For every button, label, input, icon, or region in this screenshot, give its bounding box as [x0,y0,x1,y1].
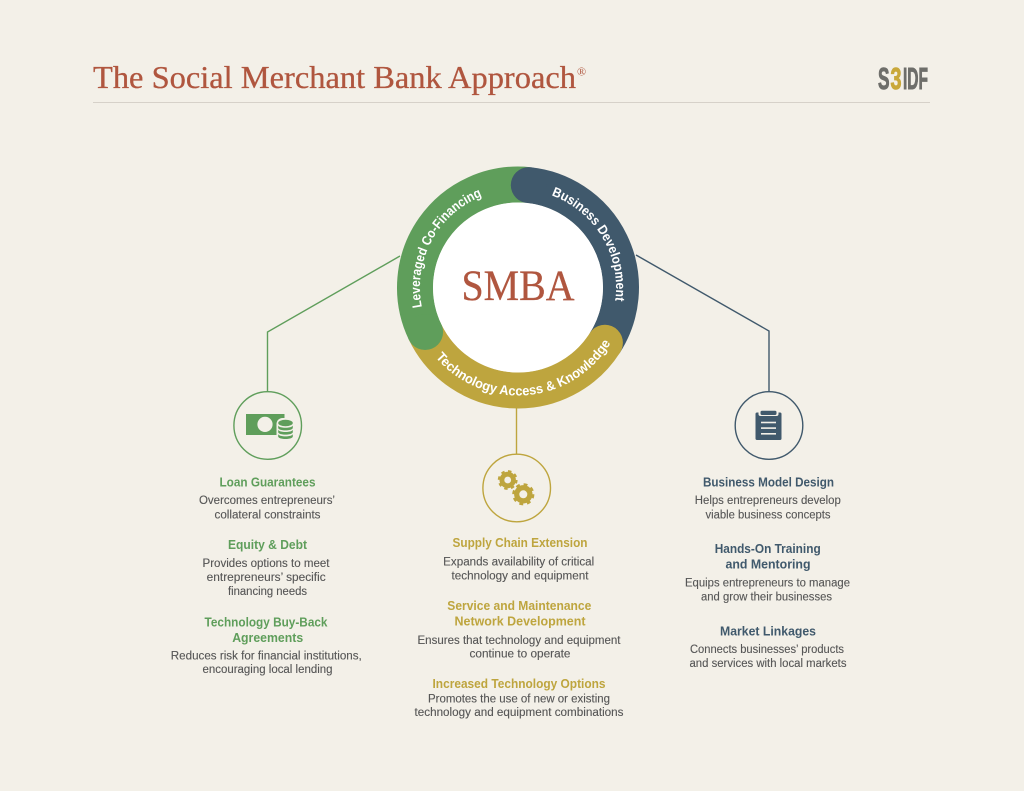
logo: S3IDF: S [878,61,890,96]
connector: green line to financing icon [268,256,400,392]
item: Technology Buy-Back Agreements: Agreements [232,631,303,645]
item: Service and Maintenance Network Development: continue to operate [470,649,570,661]
item: Supply Chain Extension: technology and equipment [452,570,589,582]
item: Equity & Debt: entrepreneurs’ specific [207,572,326,584]
item: Hands-On Training and Mentoring: and Mentoring [726,558,810,572]
panel: center column, technology [414,536,624,719]
item: Hands-On Training and Mentoring: Equips entrepreneurs to manage [685,578,850,590]
item: Service and Maintenance Network Development: Network Development [454,615,586,629]
connector: gold line to technology icon [516,405,518,454]
logo: S3IDF: 3 [890,61,902,96]
item: Hands-On Training and Mentoring: and grow their businesses [701,592,832,604]
SMBA ring diagram [397,166,639,408]
item: Market Linkages: Connects businesses’ products [690,644,844,656]
item: Supply Chain Extension: Supply Chain Extension [452,536,588,550]
item: Technology Buy-Back Agreements [171,616,362,676]
title: ® [577,64,586,78]
icon: gears [483,454,550,522]
item: Service and Maintenance Network Development: Service and Maintenance [447,599,591,613]
item: Technology Buy-Back Agreements: Reduces risk for financial institutions, [171,650,362,662]
item: Service and Maintenance Network Development: Ensures that technology and equipment [418,635,621,647]
ring label: Leveraged Co-Financing: Leveraged Co-Financing [412,190,482,308]
center circle with SMBA [433,202,603,372]
item: Technology Buy-Back Agreements: Technology Buy-Back [204,616,328,630]
item: Equity & Debt: financing needs [228,586,307,598]
item: Business Model Design [695,476,841,522]
item: Increased Technology Options: Increased Technology Options [432,677,606,691]
item: Service and Maintenance Network Development [418,599,621,661]
connector: blue line to business icon [636,255,769,392]
title: The Social Merchant Bank Approach [93,59,576,95]
item: Increased Technology Options [414,677,624,719]
panel: right column, business development [685,476,850,670]
ring label: Business Development: Business Development [552,187,624,302]
item: Loan Guarantees: Loan Guarantees [220,476,316,490]
item: Hands-On Training and Mentoring: Hands-On Training [715,542,821,556]
item: Equity & Debt: Equity & Debt [228,538,308,552]
item: Market Linkages: Market Linkages [720,625,816,639]
item: Hands-On Training and Mentoring [685,542,850,604]
item: Market Linkages: and services with local markets [690,658,847,670]
item: Business Model Design: viable business concepts [706,510,831,522]
item: Market Linkages [690,625,847,670]
item: Business Model Design: Helps entrepreneurs develop [695,495,841,507]
item: Business Model Design: Business Model Design [703,476,834,490]
item: Supply Chain Extension [443,536,594,582]
item: Equity & Debt [202,538,330,598]
item: Loan Guarantees [199,476,335,522]
icon: clipboard [735,392,803,459]
logo: S3IDF: IDF [903,61,928,96]
item: Increased Technology Options: Promotes the use of new or existing [428,694,610,706]
item: Technology Buy-Back Agreements: encouraging local lending [202,664,332,676]
item: Equity & Debt: Provides options to meet [202,558,330,570]
ring label: Technology Access & Knowledge: Technology Access & Knowledge [438,340,610,396]
logo: S3IDF [878,61,928,96]
icon: money and coins [234,392,302,459]
panel: left column, financing [171,476,362,676]
item: Loan Guarantees: Overcomes entrepreneurs’ [199,495,335,507]
item: Loan Guarantees: collateral constraints [214,510,321,522]
center circle with SMBA: SMBA [462,263,574,310]
item: Supply Chain Extension: Expands availability of critical [443,557,594,569]
item: Increased Technology Options: technology and equipment combinations [414,707,624,719]
